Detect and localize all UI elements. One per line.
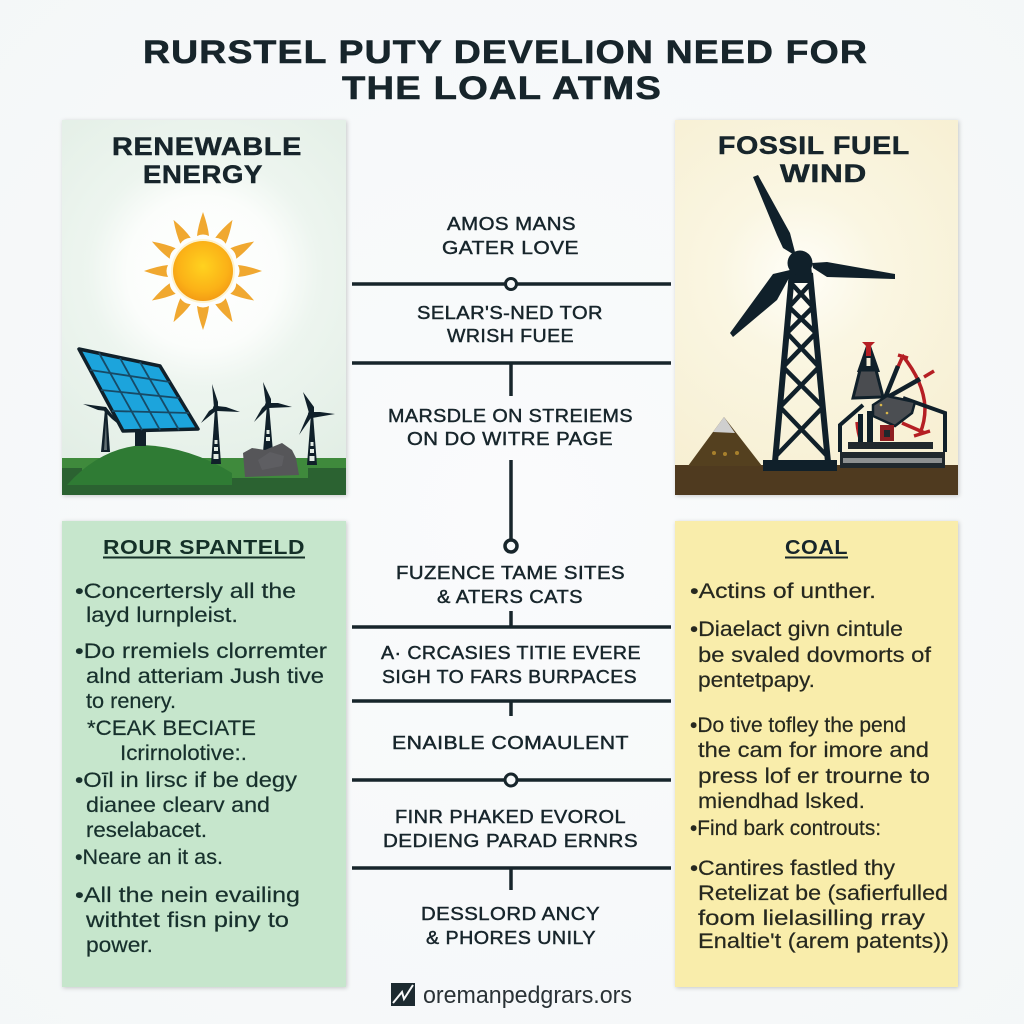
bullet list: yellow panel: •Cantires fastled thy xyxy=(690,857,896,880)
bullet list: yellow panel: be svaled dovmorts of xyxy=(698,644,931,667)
icon: solar panel xyxy=(79,349,198,446)
center flow: text labels xyxy=(381,213,641,948)
heading: coal: COAL xyxy=(785,536,848,559)
heading: renewable energy: ENERGY xyxy=(143,161,263,189)
center flow: text labels: AMOS MANS xyxy=(447,213,576,234)
heading: green panel: ROUR SPANTELD xyxy=(103,536,305,559)
bullet list: yellow panel: pentetpapy. xyxy=(698,669,815,692)
bullet list: yellow panel: •Actins of unther. xyxy=(690,580,876,603)
bullet list: green panel: alnd atteriam Jush tive xyxy=(86,665,324,688)
footer: logo and site name: oremanpedgrars.ors xyxy=(423,982,632,1009)
center flow: text labels: ENAIBLE COMAULENT xyxy=(392,732,629,753)
bullet list: green panel: •All the nein evailing xyxy=(75,884,300,907)
icon: wind turbine 3 xyxy=(254,382,292,452)
center flow: text labels: GATER LOVE xyxy=(442,237,579,258)
bullet list: green panel: to renery. xyxy=(86,690,176,713)
heading: renewable energy xyxy=(112,133,302,189)
bullet list: green panel: •Oīl in lirsc if be degy xyxy=(75,769,298,792)
icon: small wind turbine left xyxy=(83,404,122,452)
bullet list: yellow panel: •Diaelact givn cintule xyxy=(690,618,903,641)
bullet list: green panel: power. xyxy=(86,934,153,957)
icon: sun xyxy=(144,212,262,330)
title xyxy=(143,34,868,106)
bullet list: yellow panel: Enaltie't (arem patents)) xyxy=(698,930,949,953)
panel: green text list xyxy=(62,521,346,987)
icon: wind turbine 2 xyxy=(201,384,240,464)
center flow: text labels: & PHORES UNILY xyxy=(426,927,596,948)
ground: grass xyxy=(62,445,346,495)
bullet list: yellow panel: •Do tive tofley the pend xyxy=(690,714,906,737)
bullet list: yellow panel: foom lielasilling rray xyxy=(698,907,926,930)
panel: fossil fuel wind xyxy=(675,120,958,495)
bullet list: green panel: layd lurnpleist. xyxy=(86,604,238,627)
heading: renewable energy: RENEWABLE xyxy=(112,133,302,161)
center flow: text labels: & ATERS CATS xyxy=(437,586,583,607)
heading: fossil fuel wind: FOSSIL FUEL xyxy=(718,132,910,160)
heading: fossil fuel wind xyxy=(718,132,910,188)
bullet list: green panel: withtet fisn piny to xyxy=(85,909,289,932)
center flow: text labels: DEDIENG PARAD ERNRS xyxy=(383,830,638,851)
icon: coal rock xyxy=(243,443,299,477)
bullet list: yellow panel: Retelizat be (safierfulled xyxy=(698,882,948,905)
center flow: text labels: MARSDLE ON STREIEMS xyxy=(388,405,633,426)
heading: fossil fuel wind: WIND xyxy=(780,160,867,188)
bullet list: green panel: reselabacet. xyxy=(86,819,207,842)
title: THE LOAL ATMS xyxy=(342,70,662,106)
panel: yellow text list xyxy=(675,521,958,987)
bullet list: yellow panel: press lof er trourne to xyxy=(698,765,930,788)
center flow: connector lines xyxy=(352,278,671,890)
bullet list: yellow panel: the cam for imore and xyxy=(698,739,929,762)
bullet list: green panel: •Do rremiels clorremter xyxy=(75,640,327,663)
bullet list: yellow panel xyxy=(690,580,949,953)
bullet list: green panel: •Concertersly all the xyxy=(75,580,296,603)
bullet list: green panel: Icrirnolotive:. xyxy=(120,742,247,765)
bullet list: yellow panel: •Find bark controuts: xyxy=(690,817,881,840)
bullet list: green panel: *CEAK BECIATE xyxy=(87,717,256,740)
center flow: text labels: ON DO WITRE PAGE xyxy=(407,428,613,449)
center flow: text labels: WRISH FUEE xyxy=(447,325,574,346)
icon: large wind turbine xyxy=(730,175,895,471)
icon: footer logo xyxy=(391,983,415,1006)
title: RURSTEL PUTY DEVELION NEED FOR xyxy=(143,34,868,70)
center flow: text labels: FINR PHAKED EVOROL xyxy=(395,806,626,827)
icon: fossil fuel pump machine xyxy=(840,342,945,468)
center flow: text labels: DESSLORD ANCY xyxy=(421,903,600,924)
bullet list: green panel: •Neare an it as. xyxy=(75,846,223,869)
center flow: text labels: SELAR'S-NED TOR xyxy=(417,302,603,323)
bullet list: green panel xyxy=(75,580,327,957)
center flow: text labels: SIGH TO FARS BURPACES xyxy=(382,666,637,687)
center flow: text labels: FUZENCE TAME SITES xyxy=(396,562,625,583)
panel: renewable energy xyxy=(62,120,346,495)
icon: wind turbine 4 xyxy=(299,392,335,465)
bullet list: green panel: dianee clearv and xyxy=(86,794,270,817)
bullet list: yellow panel: miendhad lsked. xyxy=(698,790,865,813)
ground and mountain xyxy=(675,417,958,495)
center flow: text labels: A· CRCASIES TITIE EVERE xyxy=(381,642,641,663)
